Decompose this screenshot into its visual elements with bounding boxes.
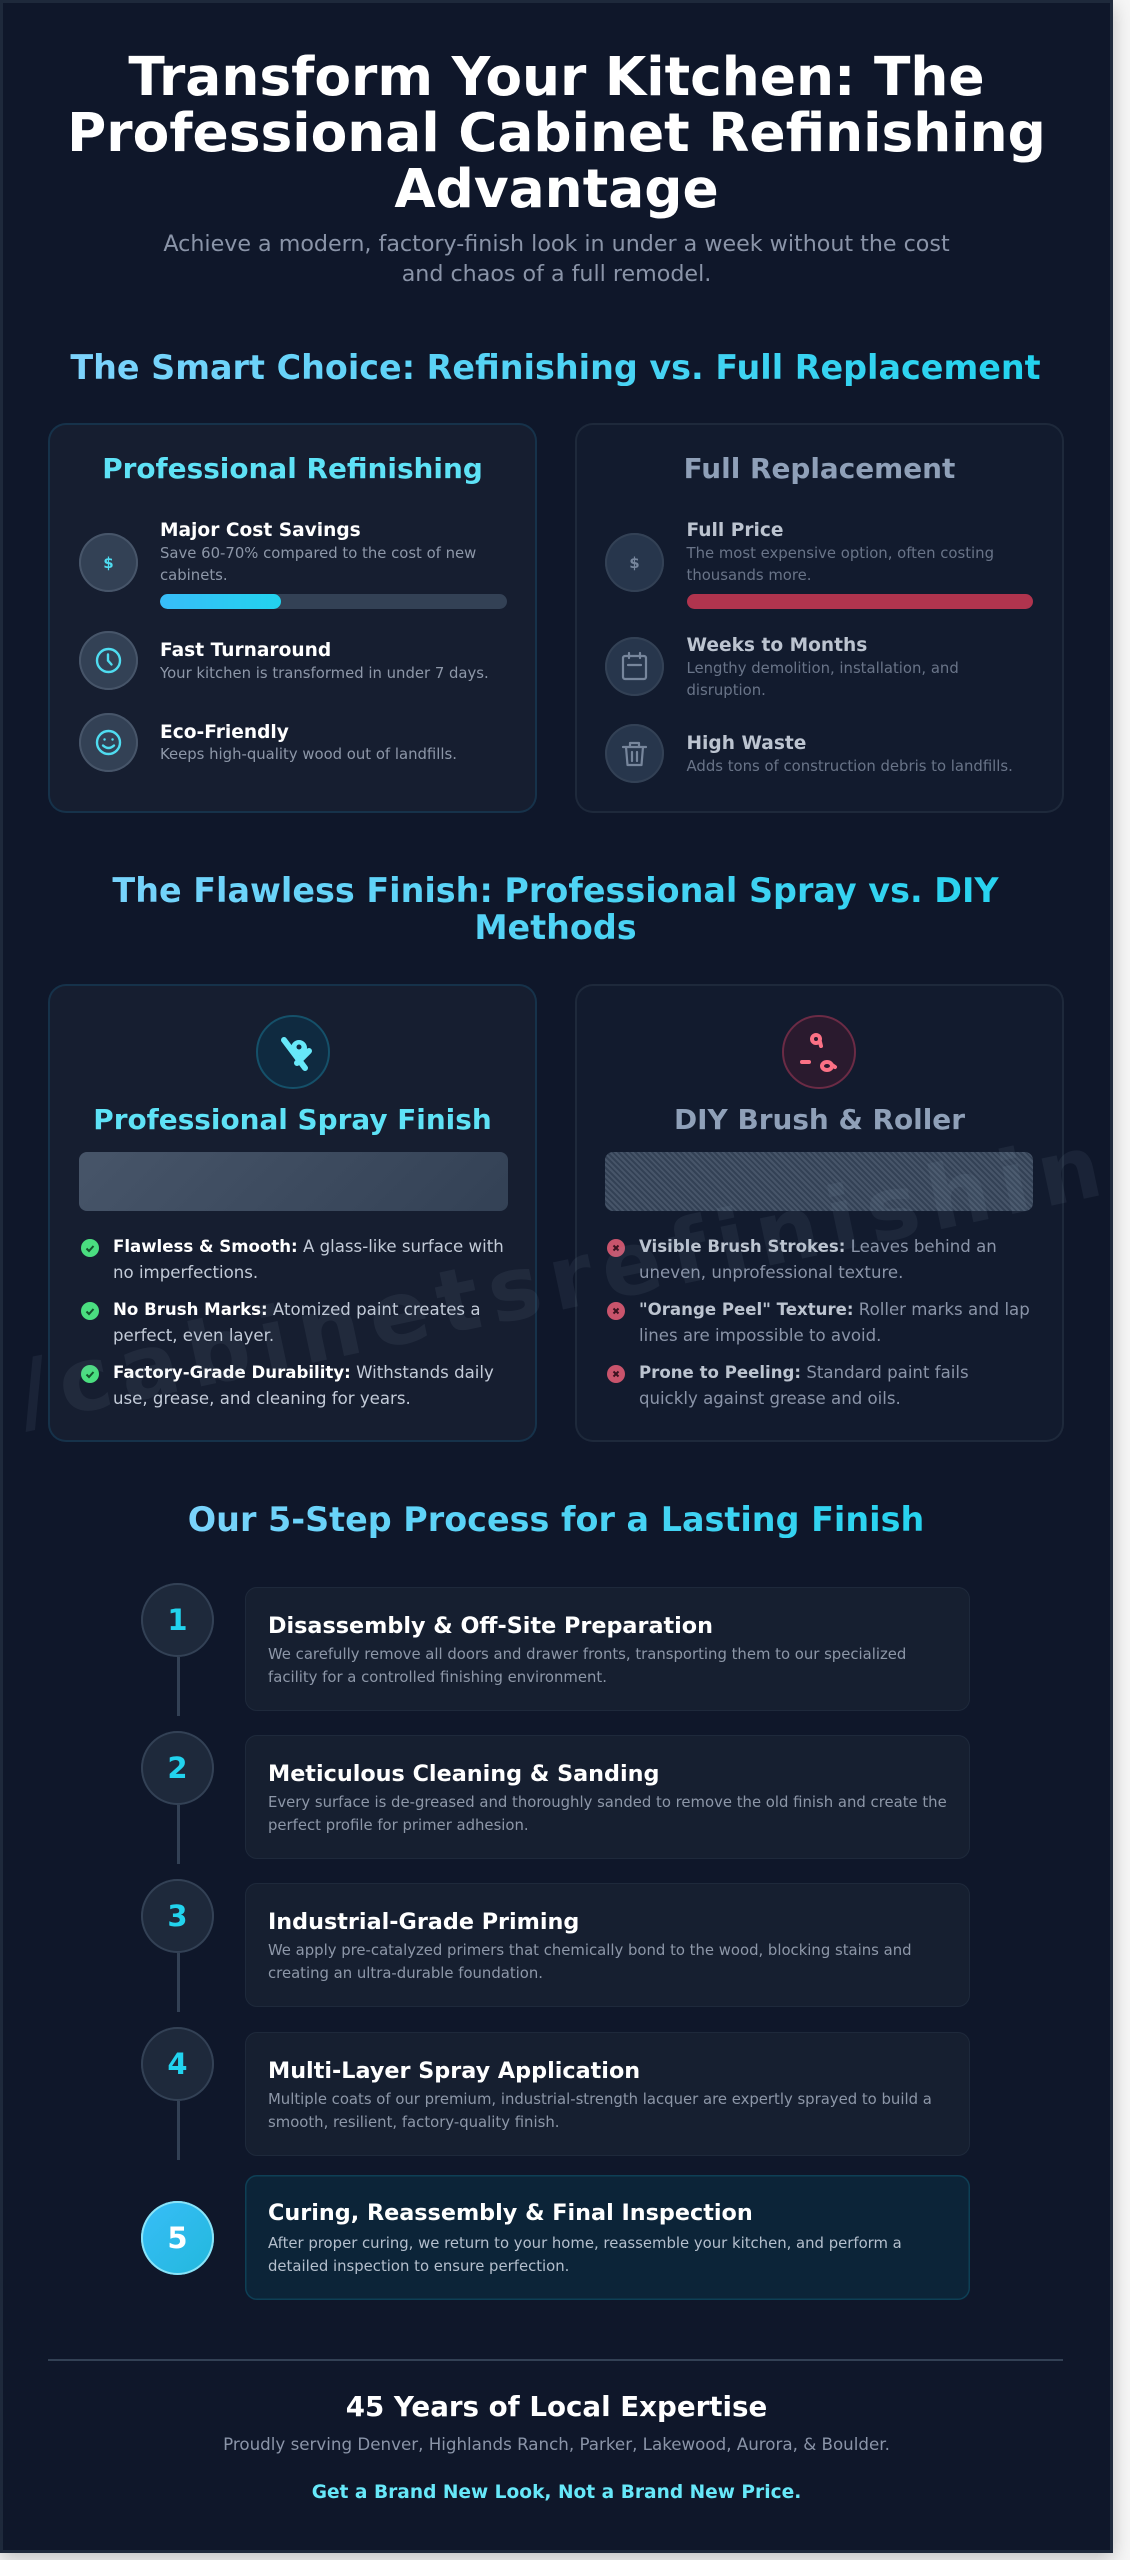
step 5 text — [268, 2234, 902, 2274]
heading: spray vs DIY: The Flawless Finish: Professional Spray vs. DIY — [112, 871, 999, 910]
list item: orange peel: lines are impossible to avoid. — [639, 1326, 881, 1345]
step 2 text — [268, 1793, 947, 1834]
icon: smile — [79, 713, 138, 772]
title: Advantage — [394, 157, 719, 220]
connector 1 — [177, 1657, 180, 1716]
heading: spray vs DIY: Methods — [474, 908, 637, 947]
panel: professional spray finish — [48, 984, 537, 1442]
panel heading: Full Replacement — [684, 452, 955, 485]
item: weeks to months text — [686, 659, 959, 699]
panel: professional refinishing — [48, 423, 537, 813]
list item: orange peel — [639, 1300, 1030, 1345]
step 1 number: 1 — [167, 1603, 188, 1637]
connector 2 — [177, 1805, 180, 1864]
icon: check — [81, 1365, 99, 1383]
footer call to action: Get a Brand New Look, Not a Brand New Price. — [312, 2482, 801, 2503]
item: cost savings text — [160, 544, 476, 584]
step 1 title: Disassembly & Off-Site Preparation — [268, 1613, 713, 1639]
item: cost savings title: Major Cost Savings — [160, 520, 361, 540]
item: weeks to months text: Lengthy demolition, installation, and — [686, 659, 959, 677]
item: cost savings text: Save 60-70% compared to the cost of new — [160, 544, 476, 562]
step 2 title: Meticulous Cleaning & Sanding — [268, 1761, 659, 1787]
item: high waste text: Adds tons of construction debris to landfills. — [686, 757, 1013, 775]
step 2 card — [245, 1735, 970, 1859]
heading: process: Our 5-Step Process for a Lasting Finish — [188, 1500, 924, 1538]
step 1 number — [141, 1583, 214, 1657]
item: full price text — [686, 544, 994, 584]
step 3 card — [245, 1883, 970, 2007]
list item: no brush marks: perfect, even layer. — [113, 1326, 274, 1345]
list item: brush strokes: uneven, unprofessional texture. — [639, 1263, 903, 1282]
subtitle — [163, 231, 950, 287]
list item: peeling: Prone to Peeling: Standard paint fails — [639, 1363, 969, 1382]
icon: cross — [607, 1239, 625, 1257]
step 4 number — [141, 2027, 214, 2101]
list item: flawless: no imperfections. — [113, 1263, 258, 1282]
icon: dollar — [605, 533, 664, 592]
icon: dollar: $ — [103, 554, 114, 572]
step 5 title: Curing, Reassembly & Final Inspection — [268, 2200, 753, 2226]
step 5 text: After proper curing, we return to your home, reassemble your kitchen, and perform a — [268, 2234, 902, 2252]
list item: durability: use, grease, and cleaning for years. — [113, 1389, 411, 1408]
panel heading: Professional Spray Finish — [93, 1103, 492, 1136]
step 3 number: 3 — [167, 1899, 188, 1933]
title: Professional Cabinet Refinishing — [67, 101, 1046, 164]
list item: durability — [113, 1363, 494, 1408]
list item: brush strokes — [639, 1237, 997, 1282]
step 4 text: Multiple coats of our premium, industrial-strength lacquer are expertly sprayed to build a — [268, 2090, 932, 2108]
item: full price title: Full Price — [686, 520, 784, 540]
step 4 title: Multi-Layer Spray Application — [268, 2058, 640, 2084]
title — [67, 45, 1046, 220]
list item: peeling: quickly against grease and oils. — [639, 1389, 901, 1408]
step 4 text: smooth, resilient, factory-quality finish. — [268, 2112, 559, 2130]
savings bar — [160, 594, 507, 609]
swatch: brush texture — [605, 1152, 1033, 1211]
item: weeks to months title: Weeks to Months — [686, 634, 867, 656]
item: eco-friendly title: Eco-Friendly — [160, 722, 289, 742]
list item: no brush marks — [113, 1300, 480, 1345]
list item: no brush marks: No Brush Marks: Atomized paint creates a — [113, 1300, 480, 1319]
step 3 text: We apply pre-catalyzed primers that chemically bond to the wood, blocking stains and — [268, 1941, 912, 1959]
list item: durability: Factory-Grade Durability: Withstands daily — [113, 1363, 494, 1382]
step 4 card — [245, 2032, 970, 2156]
step 3 text — [268, 1941, 912, 1982]
connector 4 — [177, 2101, 180, 2160]
item: full price text: thousands more. — [686, 566, 812, 584]
step 1 text — [268, 1645, 906, 1686]
icon: check — [81, 1239, 99, 1257]
step 1 text: We carefully remove all doors and drawer fronts, transporting them to our specialized — [268, 1645, 906, 1663]
item: cost savings text: cabinets. — [160, 566, 228, 584]
step 3 number — [141, 1879, 214, 1953]
list item: flawless — [113, 1237, 504, 1282]
list item: flawless: Flawless & Smooth: A glass-like surface with — [113, 1237, 504, 1256]
icon: spray gun — [256, 1015, 330, 1089]
list item: orange peel: "Orange Peel" Texture: Roller marks and lap — [639, 1300, 1030, 1319]
list item: brush strokes: Visible Brush Strokes: Leaves behind an — [639, 1237, 997, 1256]
step 5 number: 5 — [167, 2221, 188, 2255]
footer service area: Proudly serving Denver, Highlands Ranch, Parker, Lakewood, Aurora, & Boulder. — [223, 2434, 890, 2454]
step 2 number: 2 — [167, 1751, 188, 1785]
icon: cross — [607, 1365, 625, 1383]
step 4 number: 4 — [167, 2047, 188, 2081]
heading: spray vs DIY — [48, 872, 1063, 946]
icon: trash — [605, 724, 664, 783]
step 1 text: facility for a controlled finishing environment. — [268, 1668, 607, 1686]
footer heading: 45 Years of Local Expertise — [346, 2390, 767, 2423]
step 5 card — [245, 2175, 970, 2300]
list item: peeling — [639, 1363, 969, 1408]
icon: dollar — [79, 533, 138, 592]
step 5 number — [141, 2201, 214, 2275]
icon: dollar: $ — [629, 554, 640, 572]
footer rule — [48, 2359, 1063, 2361]
item: eco-friendly text: Keeps high-quality wood out of landfills. — [160, 745, 457, 763]
step 1 card — [245, 1587, 970, 1711]
step 2 text: Every surface is de-greased and thoroughly sanded to remove the old finish and create the — [268, 1793, 947, 1811]
subtitle: and chaos of a full remodel. — [402, 261, 711, 287]
step 3 title: Industrial-Grade Priming — [268, 1909, 579, 1935]
price bar — [686, 594, 1033, 609]
panel: DIY brush and roller — [575, 984, 1064, 1442]
icon: paint drips — [782, 1015, 856, 1089]
connector 3 — [177, 1953, 180, 2012]
item: high waste title: High Waste — [686, 732, 806, 754]
item: fast turnaround text: Your kitchen is transformed in under 7 days. — [160, 664, 489, 682]
step 5 text: detailed inspection to ensure perfection. — [268, 2256, 569, 2274]
swatch: smooth finish — [79, 1152, 508, 1211]
step 2 text: perfect profile for primer adhesion. — [268, 1816, 529, 1834]
panel heading: DIY Brush & Roller — [674, 1103, 965, 1136]
step 3 text: creating an ultra-durable foundation. — [268, 1964, 543, 1982]
icon: check — [81, 1302, 99, 1320]
item: fast turnaround title: Fast Turnaround — [160, 640, 331, 660]
item: weeks to months text: disruption. — [686, 681, 766, 699]
panel heading: Professional Refinishing — [102, 452, 483, 485]
icon: clock — [79, 631, 138, 690]
item: full price text: The most expensive option, often costing — [686, 544, 994, 562]
icon: calendar — [605, 637, 664, 696]
step 2 number — [141, 1731, 214, 1805]
icon: cross — [607, 1302, 625, 1320]
heading: refinishing vs replacement: The Smart Choice: Refinishing vs. Full Replacement — [70, 348, 1041, 387]
title: Transform Your Kitchen: The — [128, 45, 985, 108]
panel: full replacement — [575, 423, 1064, 813]
subtitle: Achieve a modern, factory-finish look in under a week without the cost — [163, 231, 950, 257]
step 4 text — [268, 2090, 932, 2130]
